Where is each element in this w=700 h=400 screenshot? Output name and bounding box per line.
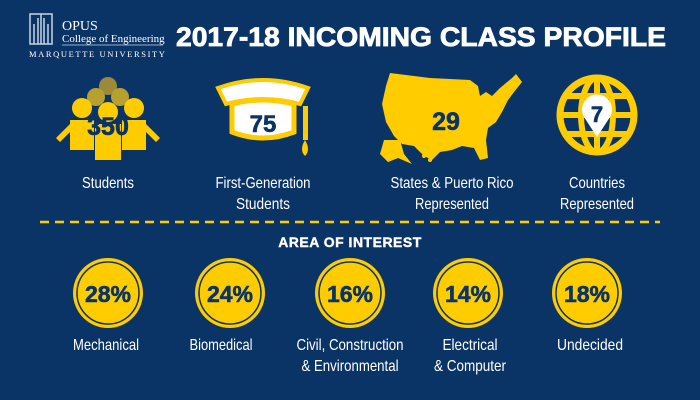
labels top: Countries	[569, 175, 625, 192]
logo: MARQUETTE UNIVERSITY	[29, 49, 167, 59]
labels bottom: & Computer	[434, 358, 507, 375]
labels top: Represented	[560, 196, 634, 213]
icon: globe: 7	[591, 102, 603, 127]
title: 2017-18 INCOMING CLASS PROFILE	[176, 22, 666, 52]
circles: 14%	[445, 281, 491, 307]
circles: 28%	[85, 281, 131, 307]
labels top: Represented	[415, 196, 489, 213]
icon: students: 350	[87, 113, 129, 141]
labels bottom	[73, 337, 623, 375]
icon: students	[56, 77, 160, 160]
labels bottom: Mechanical	[73, 337, 139, 354]
labels bottom: Electrical	[442, 337, 498, 354]
labels bottom: Civil, Construction	[296, 337, 404, 354]
labels bottom: & Environmental	[302, 358, 398, 375]
circles: 16%	[327, 281, 373, 307]
labels top	[82, 175, 634, 213]
labels top: States & Puerto Rico	[390, 175, 514, 192]
circles: 24%	[207, 281, 253, 307]
labels top: Students	[236, 196, 290, 213]
icon: grad cap	[218, 80, 308, 156]
icon: US map: 29	[432, 108, 460, 136]
circles: 18%	[564, 281, 610, 307]
logo	[29, 14, 167, 59]
labels top: First-Generation	[216, 175, 310, 192]
labels bottom: Undecided	[557, 337, 623, 354]
icon: grad cap: 75	[250, 111, 276, 138]
labels bottom: Biomedical	[190, 337, 252, 354]
logo: College of Engineering	[62, 33, 165, 45]
heading: area of interest: AREA OF INTEREST	[278, 234, 422, 250]
labels top: Students	[82, 175, 134, 192]
logo: OPUS	[62, 19, 98, 34]
icon: globe	[560, 78, 634, 152]
circles	[73, 258, 622, 328]
icon: US map	[380, 73, 522, 164]
